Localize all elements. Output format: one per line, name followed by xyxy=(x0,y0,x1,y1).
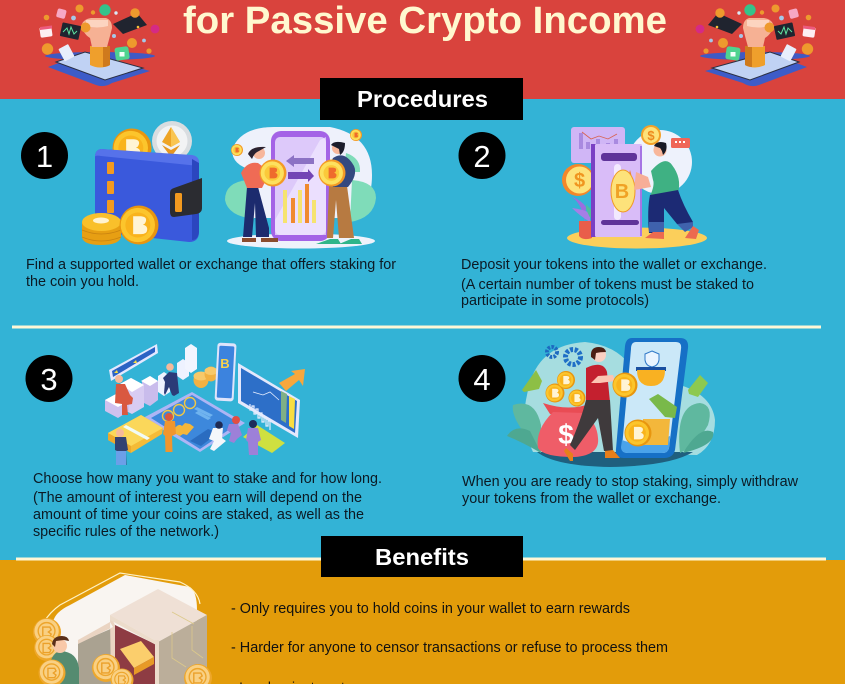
text: step 2: (A certain number of tokens must be staked to xyxy=(461,277,754,293)
phone xyxy=(215,343,237,401)
icon: man pushing coin into phone xyxy=(562,125,707,248)
step 4 number: 4 xyxy=(473,362,491,397)
text: step 2 xyxy=(461,257,767,309)
step 1 number xyxy=(21,132,68,179)
heading: Benefits: Benefits xyxy=(375,544,469,570)
text: step 3 xyxy=(33,471,382,540)
text: step 3: amount of time your coins are staked, as well as the xyxy=(33,507,364,523)
text: step 4: When you are ready to stop staking, simply withdraw xyxy=(462,474,798,490)
step 3 number: 3 xyxy=(40,362,58,397)
text: benefits list: - Only requires you to hold coins in your wallet to earn rewards xyxy=(231,600,630,617)
step 4 number xyxy=(458,355,506,402)
step 3 number xyxy=(26,355,72,402)
phone: B xyxy=(220,356,230,371)
text: step 1: Find a supported wallet or exchange that offers staking for xyxy=(26,257,396,273)
coins xyxy=(194,366,218,388)
header banner xyxy=(0,0,845,99)
icon: man pushing coin into phone: $ xyxy=(574,170,585,192)
panel: benefits background xyxy=(0,560,845,684)
divider line xyxy=(12,326,821,328)
icon: isometric crypto market scene xyxy=(105,343,305,465)
money stack xyxy=(108,415,163,453)
divider under step section xyxy=(16,558,826,560)
text: benefits list: - Harder for anyone to censor transactions or refuse to process them xyxy=(231,639,668,656)
icon: header fist left xyxy=(39,4,159,86)
people xyxy=(115,363,261,465)
icon: wallet with coins xyxy=(82,121,202,245)
icon: safe with coins and person xyxy=(33,573,212,684)
text: step 4 xyxy=(462,474,798,507)
text: step 4: your tokens from the wallet or exchange. xyxy=(462,491,721,507)
text: step 2: participate in some protocols) xyxy=(461,293,649,309)
icon: two people exchanging bitcoin xyxy=(225,127,376,248)
text: step 3: (The amount of interest you earn will depend on the xyxy=(33,490,362,506)
arrow xyxy=(279,369,305,391)
text: step 1: the coin you hold. xyxy=(26,274,139,290)
text: benefits list xyxy=(231,600,668,684)
step 1 number: 1 xyxy=(36,139,53,174)
heading: Benefits xyxy=(321,536,523,577)
banknote xyxy=(243,425,285,453)
board xyxy=(143,392,245,452)
background: blue procedures section xyxy=(0,99,845,560)
server racks xyxy=(105,344,197,418)
icon: header fist right xyxy=(696,4,816,86)
icon: man withdrawing coins from phone: $ xyxy=(558,419,574,450)
text: step 3: specific rules of the network.) xyxy=(33,524,219,540)
heading: Procedures: Procedures xyxy=(357,86,488,112)
icon: man pushing coin into phone: $ xyxy=(647,128,655,143)
icon: man pushing coin into phone: B xyxy=(615,181,629,203)
step 2 number: 2 xyxy=(473,139,491,174)
heading: Procedures xyxy=(320,78,523,120)
icon: man withdrawing coins from phone xyxy=(507,338,715,467)
title: for Passive Crypto Income xyxy=(183,0,667,42)
chart panel xyxy=(238,363,300,438)
text: step 3: Choose how many you want to stake and for how long. xyxy=(33,471,382,487)
step 2 number xyxy=(458,132,506,179)
banner xyxy=(109,344,158,381)
text: step 2: Deposit your tokens into the wallet or exchange. xyxy=(461,257,767,273)
text: step 1 xyxy=(26,257,396,290)
